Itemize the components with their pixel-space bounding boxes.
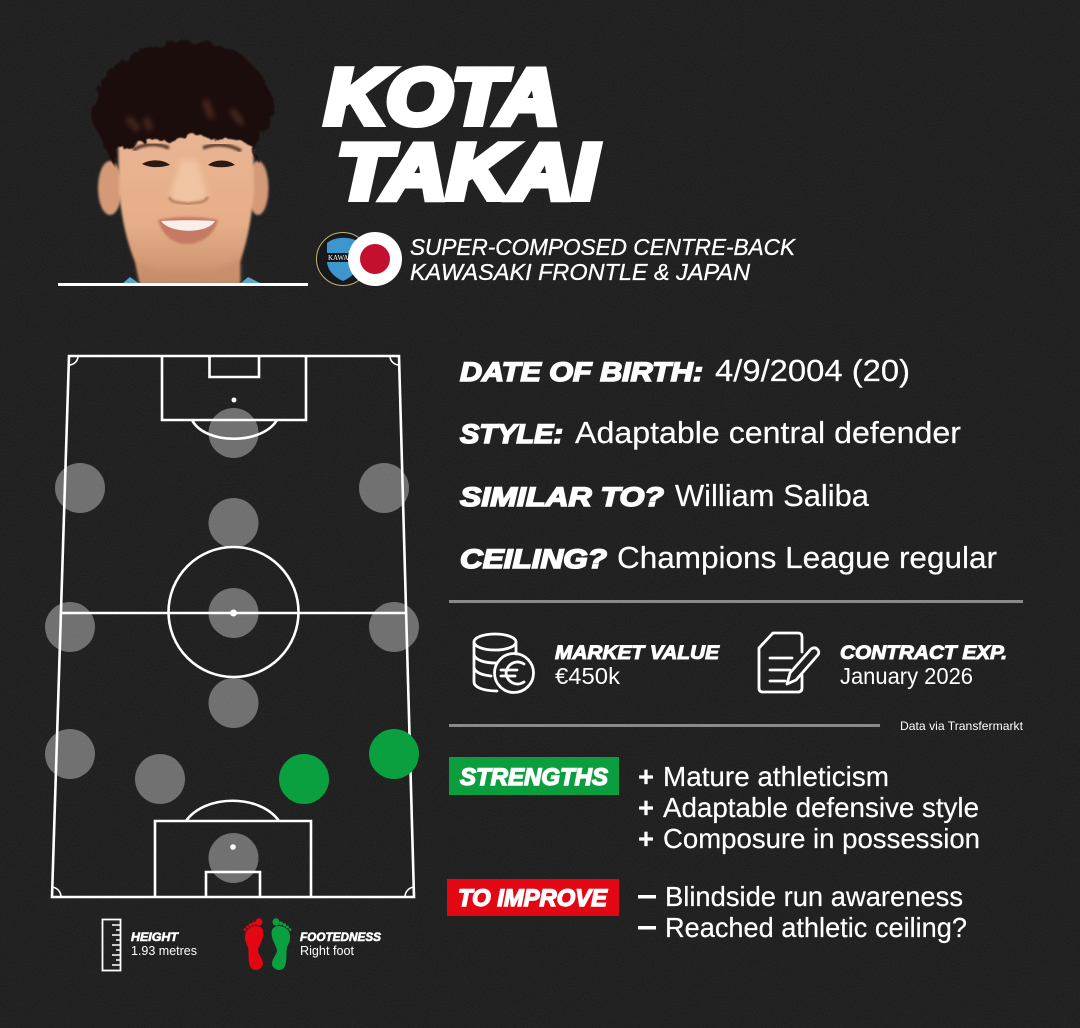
footedness block: Right foot — [300, 943, 354, 958]
position circles: unplayed — [45, 408, 419, 883]
icon: ruler — [102, 920, 120, 970]
source note: Data via Transfermarkt — [900, 719, 1024, 733]
ceiling: Champions League regular — [617, 540, 997, 575]
to improve badge: TO IMPROVE — [458, 885, 608, 912]
market value block — [474, 634, 720, 692]
to improve list: Blindside run awareness — [665, 881, 963, 912]
icon: left foot red — [244, 918, 263, 970]
to improve badge — [447, 879, 619, 916]
contract block: January 2026 — [840, 663, 973, 689]
pitch diagram — [45, 356, 419, 897]
similar to — [460, 478, 870, 513]
ceiling: CEILING? — [460, 544, 607, 574]
face and neck — [118, 130, 254, 284]
contract block — [759, 633, 1007, 692]
market value block: MARKET VALUE — [555, 643, 720, 664]
flag of Japan — [348, 232, 402, 286]
date of birth — [460, 353, 910, 388]
player name: TAKAI — [337, 128, 598, 216]
strengths badge: STRENGTHS — [460, 764, 608, 791]
height block — [102, 920, 197, 970]
contract block: CONTRACT EXP. — [840, 643, 1007, 664]
style: STYLE: — [460, 419, 563, 449]
strengths list: + — [638, 823, 654, 854]
profile facts — [460, 353, 997, 575]
subtitle: KAWASAKI FRONTLE & JAPAN — [410, 259, 750, 285]
date of birth: DATE OF BIRTH: — [460, 357, 703, 387]
strengths list: + — [638, 792, 654, 823]
height block: HEIGHT — [131, 932, 179, 944]
photo baseline — [58, 283, 308, 286]
footedness block: FOOTEDNESS — [300, 932, 381, 944]
style: Adaptable central defender — [575, 415, 961, 450]
brows and eyes — [133, 144, 241, 167]
penalty and centre spots — [230, 398, 237, 850]
player name — [325, 52, 598, 216]
strengths list — [638, 761, 980, 854]
similar to: William Saliba — [675, 478, 870, 513]
icon: contract with pen — [759, 633, 819, 692]
strengths badge — [449, 757, 619, 795]
nose — [170, 160, 207, 203]
icon: right foot green — [272, 918, 291, 970]
icon: coins — [474, 634, 534, 692]
club badge: KAWASAKI — [328, 254, 365, 262]
subtitle — [410, 234, 797, 285]
player photo — [93, 42, 275, 284]
hair — [93, 42, 275, 167]
ears — [98, 161, 268, 215]
chin shadow — [138, 258, 240, 284]
subtitle: SUPER-COMPOSED CENTRE-BACK — [410, 234, 797, 260]
player name: KOTA — [325, 52, 559, 140]
ceiling — [460, 540, 997, 575]
strengths list: + — [638, 761, 654, 792]
club badge — [316, 232, 370, 286]
date of birth: 4/9/2004 (20) — [715, 353, 910, 388]
market value block: €450k — [555, 663, 621, 689]
smile — [158, 217, 218, 244]
strengths list: Mature athleticism — [663, 761, 889, 792]
to improve list — [638, 881, 967, 943]
footedness block — [244, 918, 381, 970]
to improve list: Reached athletic ceiling? — [665, 912, 967, 943]
pitch lines — [52, 356, 414, 897]
similar to: SIMILAR TO? — [460, 482, 664, 512]
strengths list: Composure in possession — [663, 823, 980, 854]
height block: 1.93 metres — [131, 943, 197, 958]
position circles: played — [279, 729, 419, 804]
strengths list: Adaptable defensive style — [663, 792, 979, 823]
